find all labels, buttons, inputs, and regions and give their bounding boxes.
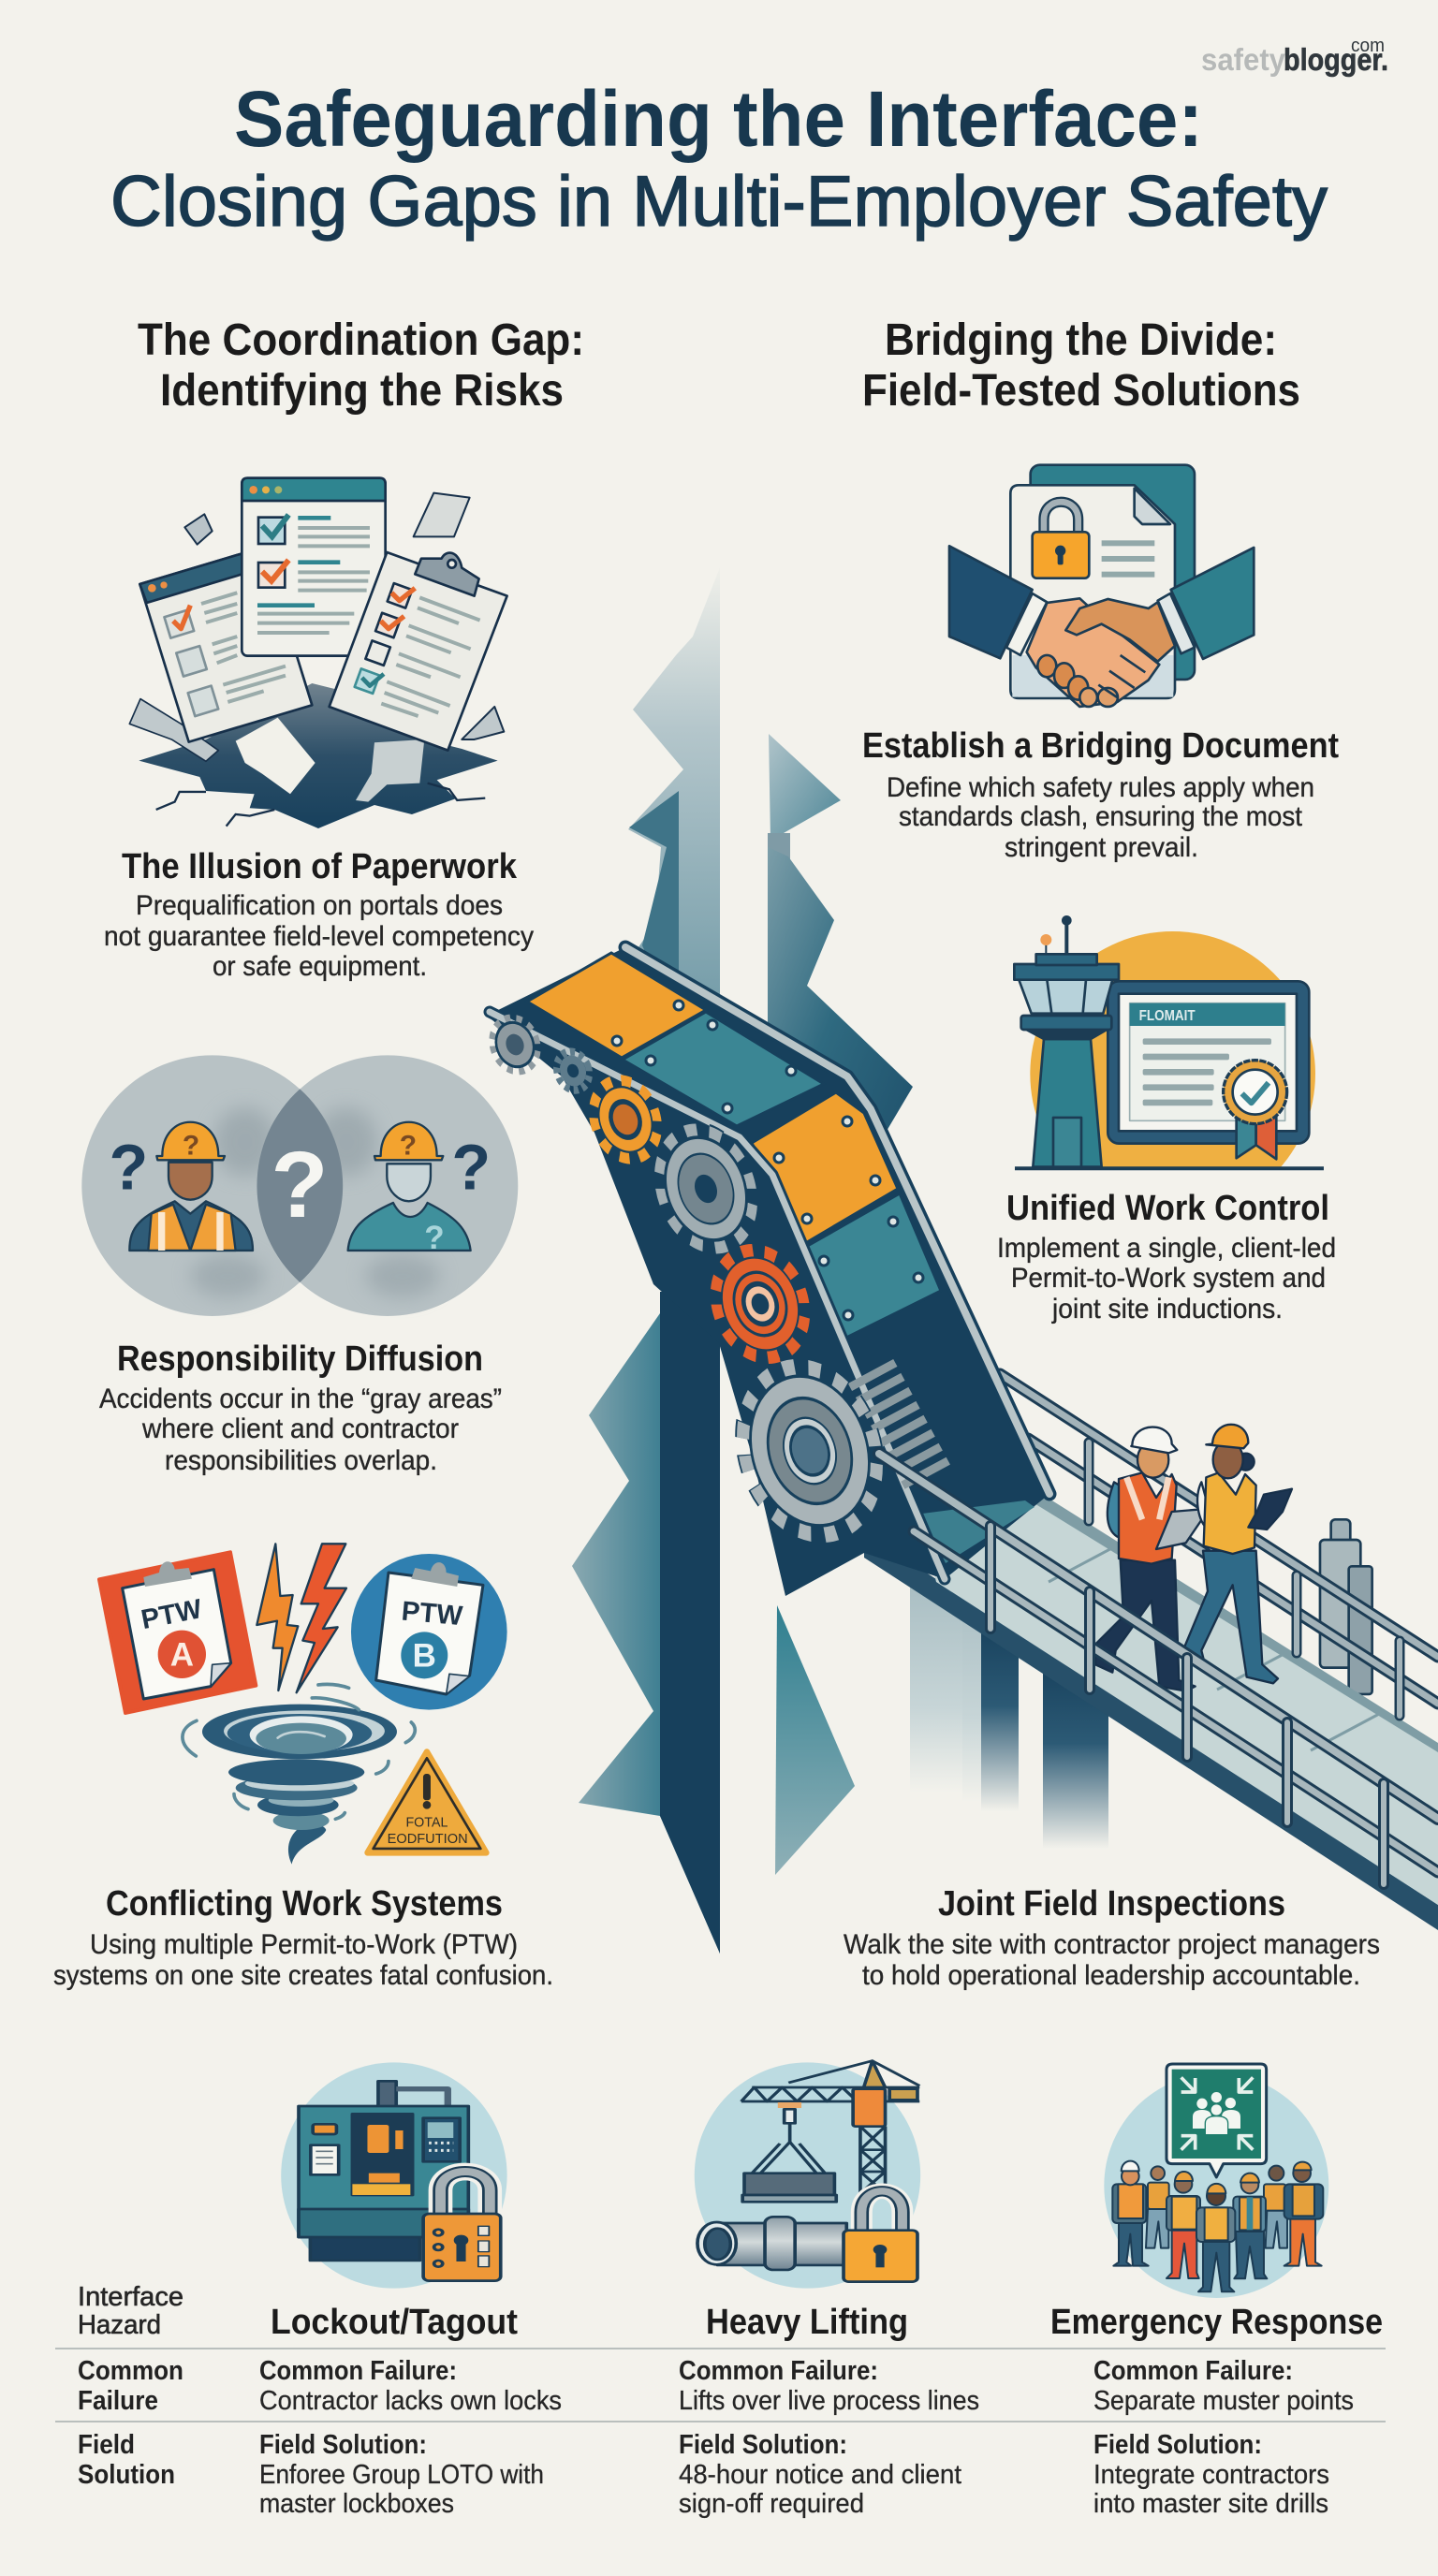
text: joint field inspections: Walk the site with contractor project managers (844, 1929, 1380, 1960)
permit tablet: FLOMAIT (1139, 1008, 1196, 1024)
hazard table: common failure row: Contractor lacks own locks (259, 2386, 562, 2416)
clipboard (330, 552, 507, 751)
text: establish a bridging document: Establish a Bridging Document (862, 726, 1339, 766)
tornado (183, 1684, 415, 1865)
gear: orange red (702, 1239, 818, 1368)
question marks: ? (451, 1133, 491, 1204)
icon: control tower and permit (1013, 915, 1324, 1170)
text: responsibility diffusion (99, 1339, 502, 1476)
belt rivets (612, 1001, 923, 1320)
hazard table: column headings: Lockout/Tagout (271, 2303, 518, 2342)
tower (1014, 916, 1119, 1167)
icon: overlapping responsibility circles (81, 1055, 518, 1316)
gear: large gray (723, 1350, 897, 1552)
permit B (351, 1554, 507, 1710)
approval badge (1224, 1061, 1287, 1159)
text: the illusion of paperwork: Prequalification on portals does (136, 890, 503, 921)
chasm: left wall (572, 567, 720, 1954)
icon: crane and pipe (695, 2061, 920, 2289)
conveyor belt plates (527, 953, 941, 1339)
hazard table: field solution row: Field (78, 2430, 135, 2460)
text: the illusion of paperwork: The Illusion of Paperwork (122, 847, 518, 886)
text: establish a bridging document (862, 726, 1339, 863)
icon: paperwork over crack (129, 478, 507, 828)
middle portal page (242, 478, 386, 656)
logo: blogger. (1284, 42, 1388, 77)
text: unified work control (997, 1189, 1336, 1325)
hazard table: column headings (78, 2282, 1383, 2342)
worker one (1095, 1427, 1210, 1691)
permit B: PTW (401, 1596, 464, 1632)
near railing (879, 1454, 1438, 1884)
logo: safety (1201, 42, 1286, 77)
combination padlock (423, 2172, 501, 2281)
logo (1201, 36, 1388, 77)
text: conflicting work systems: Conflicting Work Systems (106, 1884, 503, 1924)
hazard table: column headings: Heavy Lifting (706, 2303, 908, 2342)
text: the illusion of paperwork (104, 847, 534, 982)
ground line (1015, 1163, 1324, 1174)
gear: small dark (551, 1046, 594, 1095)
hazard table: common failure row: Failure (78, 2386, 158, 2416)
text: responsibility diffusion: where client and contractor (141, 1413, 459, 1444)
hazard table: field solution row: Field Solution: (259, 2430, 427, 2460)
backdrop disc (695, 2062, 920, 2289)
far railing (1000, 1374, 1438, 1716)
icon: lockout machine (281, 2062, 507, 2289)
client worker (129, 1122, 253, 1251)
teal deck approach (922, 1500, 1034, 1563)
hazard table: common failure row: Common Failure: (1093, 2356, 1293, 2386)
title (110, 75, 1328, 242)
hazard table: field solution row (78, 2430, 1329, 2519)
permit A (99, 1552, 256, 1713)
hazard table: field solution row: Field Solution: (1093, 2430, 1262, 2460)
heading: bridging the divide: Field-Tested Solutions (862, 366, 1300, 416)
hands (1027, 598, 1175, 707)
backdrop disc (1104, 2073, 1328, 2298)
document (1010, 485, 1175, 698)
permit A: A (170, 1636, 194, 1673)
text: conflicting work systems: Using multiple Permit-to-Work (PTW) (90, 1929, 518, 1960)
text: unified work control: Unified Work Control (1006, 1189, 1329, 1228)
left portal page (139, 548, 312, 742)
hazard table: field solution row: Field Solution: (679, 2430, 847, 2460)
gear: orange small (583, 1072, 668, 1167)
inspector workers (1095, 1425, 1292, 1691)
central illustration: chasm, conveyor bridge and walkway (486, 567, 1438, 1954)
question marks: ? (109, 1133, 148, 1204)
text: responsibility diffusion: Accidents occur in the “gray areas” (99, 1383, 502, 1414)
heading: the coordination gap (138, 315, 584, 416)
hazard table: common failure row: Separate muster points (1093, 2386, 1354, 2416)
pipe (697, 2217, 846, 2270)
venn circles (81, 1055, 518, 1316)
icon: muster point and crew (1104, 2064, 1328, 2298)
text: joint field inspections: Joint Field Inspections (938, 1884, 1285, 1924)
heading: bridging the divide: Bridging the Divide: (885, 315, 1277, 365)
sleeves and cuffs (949, 546, 1254, 659)
hazard table: field solution row: Solution (78, 2460, 175, 2490)
permit B: B (413, 1638, 436, 1675)
sun disc (1030, 931, 1315, 1166)
lightning bolts (257, 1544, 346, 1692)
title: Closing Gaps in Multi-Employer Safety (110, 162, 1328, 242)
hazard table: common failure row: Common (78, 2356, 183, 2386)
text: responsibility diffusion: responsibilities overlap. (165, 1445, 437, 1476)
hazard table: field solution row: sign-off required (679, 2489, 864, 2519)
icon: conflicting permits and tornado (99, 1544, 507, 1865)
padlock (1033, 502, 1089, 578)
heading: bridging the divide (862, 315, 1300, 416)
valve cylinder (1320, 1519, 1372, 1694)
gear: gray medium (643, 1117, 769, 1261)
client worker: ? (183, 1130, 199, 1161)
warning sign: EODFUTION (388, 1832, 468, 1847)
text: establish a bridging document: stringent prevail. (1005, 832, 1198, 863)
text: establish a bridging document: standards clash, ensuring the most (899, 801, 1303, 832)
text: the illusion of paperwork: not guarantee field-level competency (104, 921, 534, 952)
warning sign: FOTAL (405, 1816, 448, 1831)
back row workers (1146, 2166, 1287, 2248)
worker two (1184, 1425, 1292, 1683)
warning sign (368, 1752, 486, 1852)
hazard table: field solution row: master lockboxes (259, 2489, 454, 2519)
text: conflicting work systems (53, 1884, 553, 1991)
title: Safeguarding the Interface: (234, 75, 1203, 163)
permit A: PTW (139, 1593, 205, 1635)
contractor worker (348, 1122, 471, 1256)
belt silver edges (490, 947, 1049, 1579)
text: conflicting work systems: systems on one site creates fatal confusion. (53, 1960, 553, 1991)
document lines (1102, 540, 1154, 578)
conveyor body (487, 947, 1049, 1596)
ground cracks and debris (156, 783, 485, 827)
contractor worker: ? (424, 1220, 445, 1256)
hazard table: common failure row: Lifts over live process lines (679, 2386, 979, 2416)
text: establish a bridging document: Define which safety rules apply when (887, 772, 1314, 803)
hazard table: common failure row: Common Failure: (679, 2356, 878, 2386)
machine (299, 2081, 468, 2261)
gear: small gray (486, 1013, 544, 1076)
spur gear stack (871, 1371, 929, 1479)
hazard table: column headings: Interface (78, 2282, 183, 2312)
text: responsibility diffusion: Responsibility Diffusion (117, 1339, 483, 1379)
text: joint field inspections: to hold operational leadership accountable. (862, 1960, 1360, 1991)
icon: handshake over document (949, 465, 1254, 707)
bridge support columns (910, 1582, 1108, 1849)
contractor worker: ? (400, 1130, 417, 1161)
heading: the coordination gap: Identifying the Risks (160, 366, 564, 416)
heading: the coordination gap: The Coordination Gap: (138, 315, 584, 365)
walkway deck (864, 1484, 1438, 1930)
hazard table: common failure row (78, 2356, 1354, 2416)
backdrop disc (281, 2062, 507, 2289)
ground crack (139, 683, 498, 828)
hazard table: column headings: Hazard (78, 2310, 161, 2340)
tower crane (741, 2061, 919, 2202)
text: joint field inspections (844, 1884, 1380, 1991)
assembly sign (1167, 2064, 1267, 2177)
hazard table: column headings: Emergency Response (1050, 2303, 1383, 2342)
back folder (1031, 465, 1195, 680)
question marks: ? (271, 1133, 329, 1237)
front row workers (1112, 2161, 1323, 2291)
question marks (109, 1133, 491, 1237)
permit tablet (1108, 981, 1309, 1144)
hazard table: common failure row: Common Failure: (259, 2356, 457, 2386)
hazard table: field solution row: into master site drills (1093, 2489, 1328, 2519)
hazard table: field solution row: 48-hour notice and client (679, 2460, 961, 2490)
text: unified work control: joint site inductions. (1051, 1294, 1283, 1325)
padlock (844, 2191, 917, 2282)
hazard table: field solution row: Integrate contractors (1093, 2460, 1329, 2490)
hazard table: field solution row: Enforee Group LOTO with (259, 2460, 544, 2490)
chasm: right wall (768, 734, 913, 1875)
text: unified work control: Implement a single, client-led (997, 1233, 1336, 1264)
logo: com (1351, 36, 1385, 56)
text: the illusion of paperwork: or safe equipment. (213, 951, 427, 982)
text: unified work control: Permit-to-Work system and (1011, 1263, 1326, 1294)
rubble (129, 493, 504, 802)
